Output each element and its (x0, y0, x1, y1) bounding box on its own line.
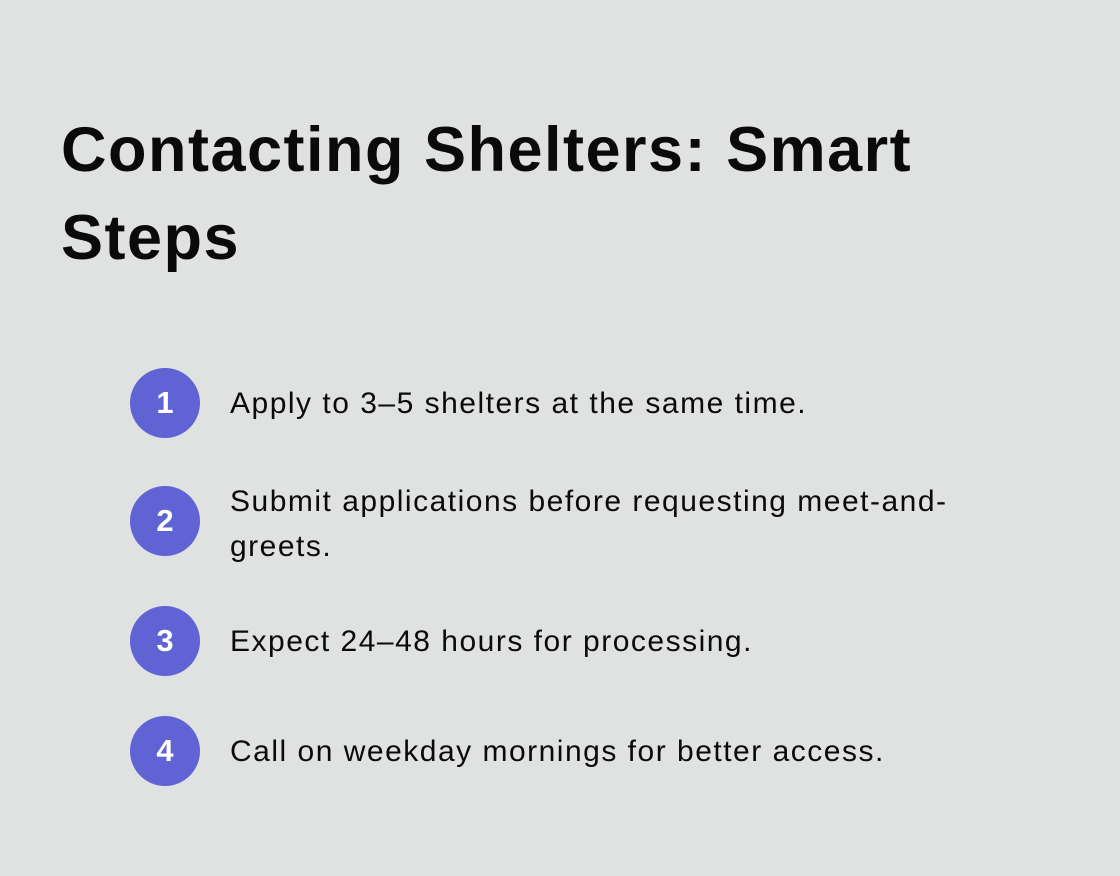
text: step 4: Call on weekday mornings for better access. (230, 735, 885, 768)
icon: number 1 (130, 368, 200, 438)
step 2 (130, 485, 948, 563)
title: Contacting Shelters: Smart (61, 115, 912, 185)
text: step 2: greets. (230, 530, 332, 563)
text: step 2: Submit applications before requesting meet-and- (230, 485, 948, 518)
step 1 (130, 368, 807, 438)
icon: number 2 (130, 486, 200, 556)
title (61, 115, 912, 273)
icon: number 2: 2 (156, 503, 174, 538)
icon: number 3 (130, 606, 200, 676)
step 3 (130, 606, 753, 676)
title: Steps (61, 203, 240, 273)
text: step 3: Expect 24–48 hours for processing. (230, 625, 753, 658)
icon: number 3: 3 (156, 623, 174, 658)
step 4 (130, 716, 885, 786)
icon: number 4 (130, 716, 200, 786)
icon: number 4: 4 (156, 733, 174, 768)
icon: number 1: 1 (156, 385, 174, 420)
text: step 1: Apply to 3–5 shelters at the same time. (230, 387, 807, 420)
text: step 2 (230, 485, 948, 563)
